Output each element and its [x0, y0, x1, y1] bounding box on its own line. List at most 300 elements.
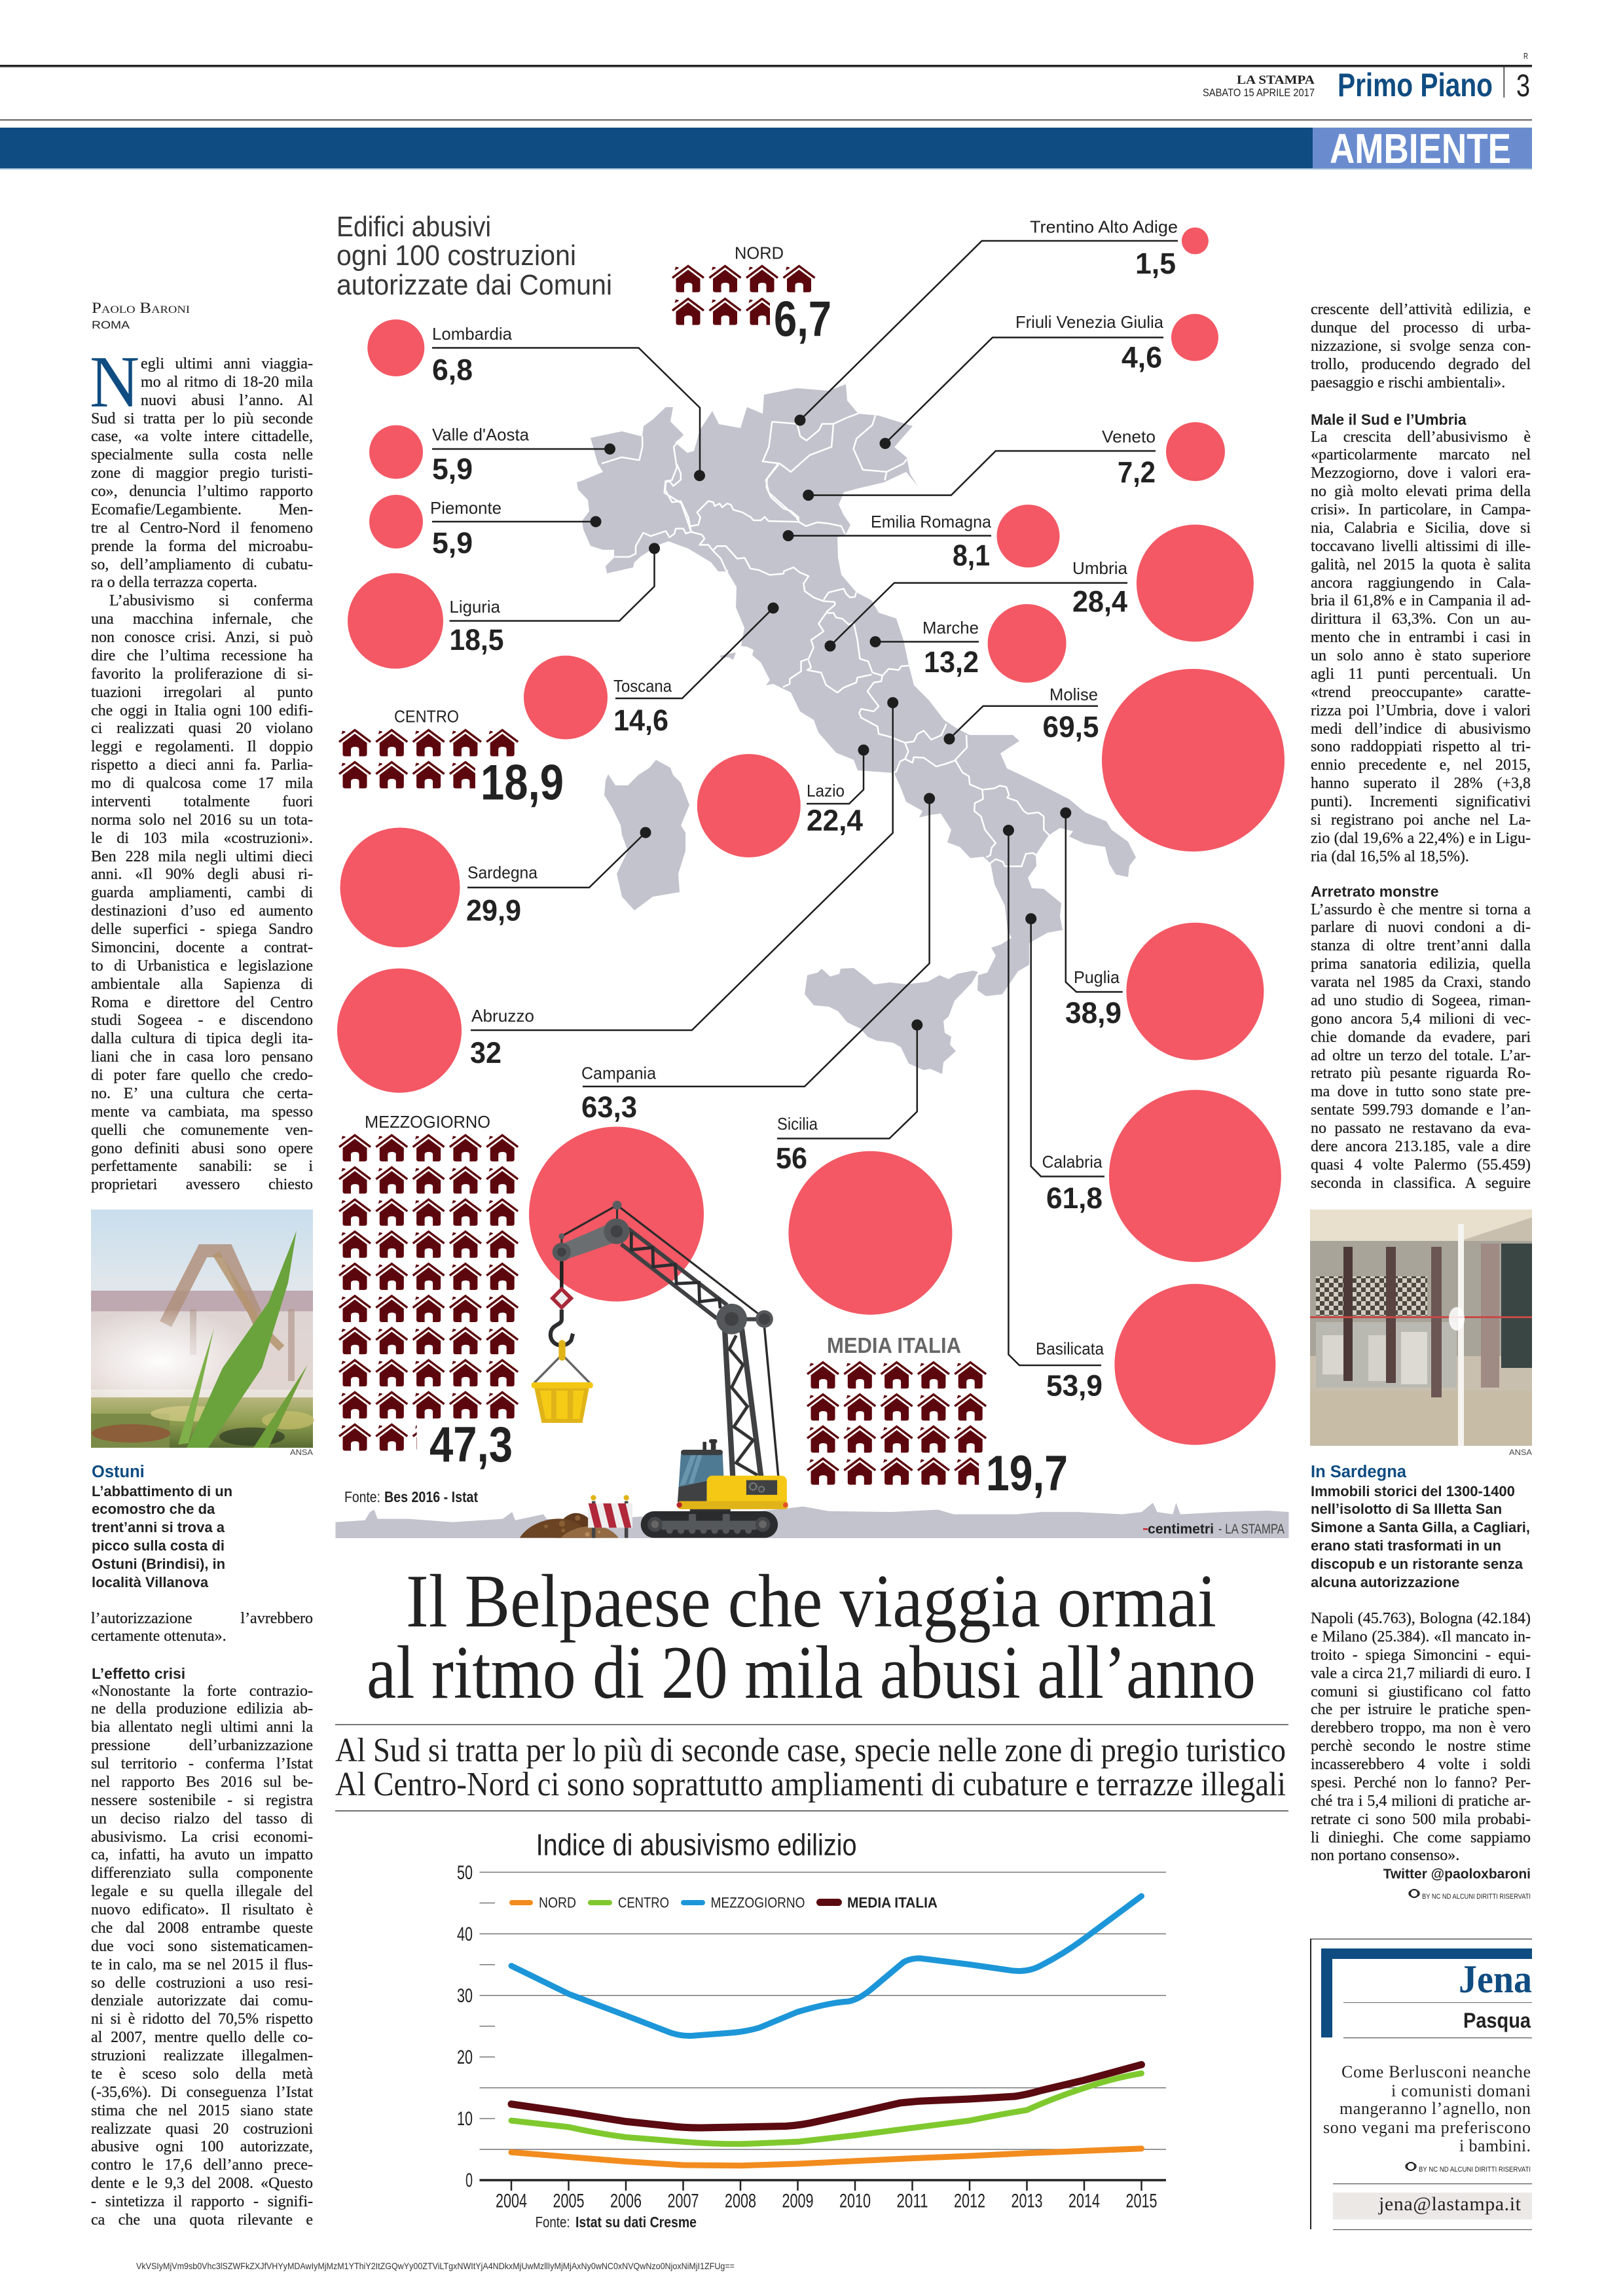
region: Umbria: 28,4 [1072, 585, 1127, 619]
region: Marche: Marche [922, 618, 979, 637]
y axis labels: 20 [457, 2047, 473, 2068]
article text: left column first part: di poter fare quello che credo- [91, 1067, 313, 1084]
article text: left column first part: to di Urbanistica e legislazione [91, 958, 313, 975]
article text: L'effetto crisi: so delle costruzioni a uso resi- [91, 1974, 313, 1991]
article text: left column first part: che oggi in Italia ogni 100 edifi- [91, 702, 313, 719]
source: Bes 2016 - Istat: Bes 2016 - Istat [384, 1488, 478, 1505]
region: Basilicata [1003, 825, 1275, 1445]
region: Friuli Venezia Giulia: 4,6 [1122, 340, 1162, 374]
region: Sardegna: Sardegna [467, 863, 538, 882]
region: Sardegna [340, 827, 651, 948]
caption: Ostuni: Ostuni (Brindisi), in [92, 1556, 225, 1572]
mark R: R [1523, 51, 1528, 61]
Jena subtitle: Pasqua [1463, 2009, 1531, 2032]
contact: jena email: jena@lastampa.it [1378, 2193, 1522, 2215]
pictogram: Nord [672, 243, 831, 348]
article text: right column ending: retrate ci sono 500 mila probabi- [1311, 1811, 1531, 1828]
x axis labels: 2014 [1068, 2191, 1100, 2212]
caption: In Sardegna: Simone a Santa Gilla, a Cagliari, [1311, 1519, 1530, 1535]
article text: left column first part: favorito la proliferazione di si- [91, 666, 313, 683]
article text: right column opening: paesaggio e rischi ambientali». [1311, 374, 1505, 391]
author handle: Twitter @paoloxbaroni [1383, 1867, 1531, 1882]
region: Piemonte: Piemonte [430, 498, 501, 518]
article text: left column first part: dire che l’ultima recessione ha [91, 647, 313, 664]
article text: Male il Sud: sono raddoppiati rispetto al tri- [1311, 738, 1531, 755]
region: Friuli Venezia Giulia [880, 312, 1218, 449]
skyline [335, 1503, 1288, 1538]
pictogram: Nord: NORD [735, 243, 784, 263]
region: Campania: 63,3 [581, 1090, 637, 1124]
box: Jena column [1310, 1939, 1532, 2230]
caption: In Sardegna: discopub e un ristorante senza [1311, 1556, 1523, 1572]
region: Veneto [803, 422, 1225, 501]
region: Toscana: 14,6 [613, 704, 668, 737]
article text: right column ending: che per istruire le pratiche spen- [1311, 1701, 1531, 1718]
region: Puglia: 38,9 [1065, 996, 1122, 1030]
article text: L'effetto crisi: legale e su quella illegale del [91, 1883, 313, 1900]
article text: left column first part: L’abusivismo si conferma [109, 592, 313, 609]
article text: right column ending: li dinieghi. Che come sappiamo [1311, 1829, 1531, 1846]
caption: Ostuni [92, 1483, 232, 1590]
caption: In Sardegna: alcuna autorizzazione [1311, 1574, 1459, 1590]
y axis labels: 30 [457, 1985, 473, 2007]
page number: 3 [1516, 69, 1530, 103]
article text: left column first part: ambientale alla Sapienza di [91, 976, 313, 993]
region: Friuli Venezia Giulia: Friuli Venezia Giulia [1015, 312, 1164, 332]
chart source [536, 2214, 697, 2231]
pictogram: Nord: 6,7 [774, 292, 831, 348]
article text: left column first part: quelli che comunemente ven- [91, 1122, 313, 1139]
article text: left column first part: non conosce crisi. Anzi, si può [91, 629, 313, 646]
pictogram: Mezzogiorno [339, 1112, 518, 1473]
article text: left column first part: Roma e direttore del Centro [91, 994, 313, 1011]
article text: L'effetto crisi: struzioni realizzate illegalmen- [91, 2047, 313, 2064]
infographic title: autorizzate dai Comuni [337, 269, 612, 301]
article text: L'effetto crisi: bia allentato negli ultimi anni la [91, 1719, 313, 1736]
article text: Male il Sud: toccavano livelli altissimi di ille- [1311, 538, 1531, 555]
article text: Male il Sud: «trend preoccupante» caratte- [1311, 684, 1531, 701]
x axis labels: 2009 [782, 2191, 813, 2212]
chart legend: CENTRO [618, 1894, 669, 1911]
series: Centro [511, 2073, 1142, 2144]
article text: left column first part: gono definiti abusi sono opere [91, 1140, 313, 1157]
caption: Ostuni: L’abbattimento di un [92, 1483, 232, 1499]
region: Veneto: Veneto [1102, 427, 1156, 446]
article text: Arretrato monstre: gono ancora 5,4 milioni di vec- [1311, 1011, 1531, 1028]
article text: L'effetto crisi: «Nonostante la forte contrazio- [91, 1682, 313, 1699]
pictogram: Mezzogiorno: MEZZOGIORNO [365, 1112, 490, 1132]
article text: left column first part: dalla cultura di tipica degli ita- [91, 1030, 313, 1047]
article text: L'effetto crisi: realizzate quasi 20 costruzioni [91, 2121, 313, 2138]
caption: Ostuni: località Villanova [92, 1574, 208, 1590]
chart source: Fonte: [536, 2214, 570, 2231]
pictogram: Centro: 18,9 [481, 755, 564, 811]
region: Liguria: Liguria [449, 597, 501, 617]
region: Campania [529, 793, 935, 1301]
region: Valle d'Aosta: Valle d'Aosta [432, 425, 530, 444]
article text: L'effetto crisi: dente e le 9,3 del 2008. «Questo [91, 2175, 313, 2192]
article text: L'effetto crisi: abusive ogni 100 autorizzate, [91, 2138, 313, 2155]
article text: left column first part: Simoncini, docente a contrat- [91, 939, 313, 956]
region: Emilia Romagna: Emilia Romagna [871, 512, 992, 531]
region: Liguria [348, 543, 660, 669]
y axis labels: 40 [457, 1924, 473, 1945]
x axis labels: 2005 [553, 2191, 584, 2212]
region: Umbria [825, 525, 1254, 652]
article text: L'effetto crisi: contro le 17,6 dell’anno prece- [91, 2157, 313, 2174]
contact: jena email [1333, 2193, 1532, 2219]
article text: left column first part: delle superfici - spiega Sandro [91, 921, 313, 938]
subheading: Male il Sud e l'Umbria: Male il Sud e l’Umbria [1311, 411, 1467, 428]
article text: Arretrato monstre: dere ancora 213.185, vale a dire [1311, 1138, 1531, 1155]
article text: Arretrato monstre: no passato ne restavano da eva- [1311, 1120, 1531, 1137]
article text: opening lines beside drop cap [141, 355, 313, 409]
article text: Male il Sud: La crescita dell’abusivismo è [1311, 428, 1531, 445]
chart title: Indice di abusivismo edilizio [536, 1828, 857, 1862]
article text: Male il Sud [1311, 428, 1531, 865]
pictogram: Centro [339, 707, 564, 811]
article text: L'effetto crisi: te in calo, ma se nel 2015 il flus- [91, 1956, 313, 1973]
article text: Arretrato monstre: ad uno studio di Sogeea, riman- [1311, 992, 1531, 1009]
region: Liguria: 18,5 [449, 623, 504, 656]
source: Bes 2016 - Istat [344, 1488, 478, 1505]
article text: left column continuation: certamente ottenuta». [91, 1628, 227, 1645]
section name: Primo Piano: Primo Piano [1338, 67, 1493, 103]
masthead: La Stampa and date: LA STAMPA [1237, 73, 1315, 87]
article text: L'effetto crisi: denziale autorizzate dai comu- [91, 1992, 313, 2009]
region: Molise: Molise [1049, 685, 1098, 704]
licence line: Jena: BY NC ND ALCUNI DIRITTI RISERVATI [1419, 2166, 1531, 2174]
pictogram: Media Italia: MEDIA ITALIA [827, 1333, 961, 1357]
article text: L'effetto crisi [90, 1682, 313, 2229]
article text: Arretrato monstre: retrato più pesante riguarda Ro- [1311, 1065, 1531, 1082]
article text: Arretrato monstre: parlare di nuovi condoni a di- [1311, 919, 1531, 936]
article text: opening lines beside drop cap: mo al ritmo di 18-20 mila [141, 374, 313, 391]
region: Basilicata: Basilicata [1036, 1339, 1104, 1359]
article text: right column ending: non portano consenso». [1311, 1847, 1459, 1864]
article text: left column first part: tuazioni irregolari al punto [91, 684, 313, 701]
series: Nord [511, 2149, 1142, 2166]
x axis labels: 2006 [610, 2191, 642, 2212]
licence line: Jena [1406, 2162, 1531, 2174]
region: Basilicata: 53,9 [1046, 1369, 1103, 1403]
pictogram: Media Italia [807, 1333, 1068, 1501]
article text: Male il Sud: agli 11 punti percentuali. Un [1311, 666, 1531, 683]
article text: right column ending: perchè secondo le nostre stime [1311, 1738, 1531, 1755]
article text: left column first part: no. E’ una cultura che certa- [91, 1085, 313, 1102]
region: Lombardia [367, 319, 705, 481]
x axis labels: 2013 [1011, 2191, 1042, 2212]
article text: Male il Sud: punti). Incrementi significativi [1311, 793, 1531, 810]
region: Emilia Romagna [783, 505, 1059, 572]
article text: left column first part: so, dell’ampliamento di cubatu- [91, 556, 313, 573]
region: Trentino Alto Adige: 1,5 [1135, 247, 1176, 280]
article text: right column ending: vale a circa 21,7 miliardi di euro. I [1311, 1665, 1531, 1682]
article text: left column first part: mente va cambiata, ma spesso [91, 1103, 313, 1121]
article text: right column opening: dunque del processo di urba- [1311, 319, 1531, 336]
byline: Paolo Baroni [92, 300, 190, 316]
tag: Ambiente: AMBIENTE [1330, 125, 1511, 172]
subheading: Arretrato monstre: Arretrato monstre [1311, 883, 1439, 900]
article text: L'effetto crisi: ne della produzione edilizia ab- [91, 1700, 313, 1717]
x axis labels: 2007 [668, 2191, 699, 2212]
article text: left column first part: ra o della terrazza coperta. [91, 574, 257, 591]
article text: Male il Sud: ancora raggiungendo in Cala- [1311, 575, 1531, 592]
caption: In Sardegna: erano stati trasformati in un [1311, 1537, 1501, 1554]
article text: left column first part: ci realizzati quasi 20 violano [91, 720, 313, 737]
region: Marche: 13,2 [924, 645, 979, 679]
y axis labels: 50 [457, 1862, 473, 1884]
article text: Male il Sud: galità, nel 2015 la quota è salita [1311, 556, 1531, 573]
article text: L'effetto crisi: che dal 2008 entrambe queste [91, 1920, 313, 1937]
article text: left column first part [91, 410, 313, 1193]
licence line: author: BY NC ND ALCUNI DIRITTI RISERVATI [1422, 1893, 1531, 1901]
article text: Arretrato monstre: stanza di oltre trent’anni dalla [1311, 937, 1531, 954]
article text: right column opening: crescente dell’attività edilizia, e [1311, 301, 1531, 318]
region: Lazio: 22,4 [807, 804, 863, 837]
credit: Centimetri - La Stampa [1143, 1522, 1285, 1537]
article text: Male il Sud: crisi». In particolare, in Campa- [1311, 501, 1531, 518]
article text: right column ending: e Milano (25.384). «Il mancato in- [1311, 1628, 1531, 1645]
Jena joke text: i bambini. [1459, 2136, 1531, 2155]
article text: left column first part: destinazioni d’uso ed aumento [91, 903, 313, 920]
article text: left column continuation: l’autorizzazione l’avrebbero [91, 1610, 313, 1627]
region: Valle d'Aosta: 5,9 [432, 452, 473, 486]
series: Mezzogiorno [511, 1896, 1142, 2036]
article text: Male il Sud: hanno superato il 28% (+3,8 [1311, 775, 1531, 792]
article text: Arretrato monstre: sentate 599.793 domande e l’an- [1311, 1102, 1531, 1119]
Jena joke text: mangeranno l’agnello, non [1340, 2099, 1531, 2118]
article text: Male il Sud: bria il 61,8% e in Campania il ad- [1311, 592, 1531, 609]
article text: right column ending [1311, 1610, 1531, 1864]
chart source: Istat su dati Cresme [575, 2214, 697, 2231]
illustration: crane [532, 1200, 788, 1538]
headline [367, 1560, 1256, 1715]
region: Sicilia: Sicilia [777, 1114, 818, 1134]
article text: left column first part: interventi totalmente fuori [91, 793, 313, 810]
article text: L'effetto crisi: - sintetizza il rapporto - signifi- [91, 2193, 313, 2210]
article text: L'effetto crisi: abusivismo. La crisi economi- [91, 1829, 313, 1846]
article text: opening lines beside drop cap: egli ultimi anni viaggia- [141, 355, 313, 372]
article text: left column first part: Ben 228 mila negli ultimi dieci [91, 848, 313, 865]
caption: Ostuni: picco sulla costa di [92, 1537, 225, 1554]
Jena joke text: Come Berlusconi neanche [1341, 2062, 1531, 2081]
article text: L'effetto crisi: pressione dell’urbanizzazione [91, 1737, 313, 1754]
x axis labels: 2012 [954, 2191, 985, 2212]
pictogram: Mezzogiorno: 47,3 [429, 1417, 513, 1473]
article text: right column opening: trollo, producendo degrado del [1311, 356, 1531, 373]
headline: al ritmo di 20 mila abusi all’anno [367, 1631, 1256, 1715]
region: Abruzzo [337, 697, 898, 1093]
photo: Ostuni demolition [62, 1210, 314, 1448]
chart legend: MEDIA ITALIA [847, 1894, 938, 1911]
article text: left column first part: guarda ampliamenti, cambi di [91, 884, 313, 901]
page code string: VkVSIyMjVm9sb0Vhc3lSZWFkZXJfVHYyMDAwIyMjMzM1YThiY2ItZGQwYy00ZTViLTgxNWItYjA4NDkxMjUwMzllIyMjMjAxNy0wNC0xNVQwNzo0NjoxNiMjI1ZFUg== [136, 2261, 735, 2271]
article text: Arretrato monstre: ma dove in tutto sono state pre- [1311, 1083, 1531, 1100]
region: Puglia [1060, 808, 1264, 1060]
subheadline [335, 1732, 1286, 1803]
region: Puglia: Puglia [1074, 967, 1120, 987]
article text: Male il Sud: un solo anno è stato superiore [1311, 647, 1531, 664]
article text: left column first part: mo di qualcosa come 17 mila [91, 775, 313, 792]
region: Veneto: 7,2 [1118, 456, 1156, 489]
region: Molise [944, 669, 1285, 852]
Jena joke text [1323, 2062, 1531, 2155]
source: Bes 2016 - Istat: Fonte: [344, 1488, 380, 1505]
region: Trentino Alto Adige [795, 217, 1209, 425]
region: Piemonte: 5,9 [432, 526, 473, 560]
region: Toscana [524, 602, 779, 740]
article text: left column first part: specialmente sulla costa nelle [91, 446, 313, 463]
chart legend [509, 1894, 938, 1911]
article text: Male il Sud: ennio precedente e, nel 2015, [1311, 757, 1531, 774]
region: Abruzzo: 32 [470, 1036, 501, 1069]
masthead: La Stampa and date [1203, 73, 1315, 99]
article text: L'effetto crisi: al 2007, mentre quello delle co- [91, 2029, 313, 2046]
byline: ROMA [92, 319, 130, 331]
article text: L'effetto crisi: te è sceso solo della metà [91, 2066, 313, 2083]
infographic title [337, 211, 612, 301]
article text: right column ending: derebbero troppo, ma non è vero [1311, 1719, 1531, 1736]
x axis labels: 2015 [1126, 2191, 1158, 2212]
photo: Sardegna restaurant [1310, 1210, 1532, 1446]
region: Calabria [1025, 913, 1281, 1262]
article text: left column first part: proprietari avessero chiesto [91, 1176, 313, 1193]
region: Trentino Alto Adige: Trentino Alto Adige [1030, 217, 1178, 237]
region: Lombardia: Lombardia [432, 324, 513, 344]
article text: Arretrato monstre: L’assurdo è che mentre si torna a [1311, 901, 1531, 918]
blue band [0, 128, 1532, 170]
article text: left column first part: anni. «Il 90% degli abusi ri- [91, 866, 313, 883]
subheading: L'effetto crisi: L’effetto crisi [92, 1665, 185, 1682]
caption title: In Sardegna: In Sardegna [1311, 1463, 1406, 1481]
map of Italy [577, 384, 1136, 1074]
series: Media Italia [511, 2064, 1142, 2128]
article text: Male il Sud: medi dell’indice di abusivismo [1311, 720, 1531, 737]
region: Calabria: 61,8 [1046, 1181, 1103, 1215]
article text: L'effetto crisi: stima che nel 2015 siano state [91, 2102, 313, 2119]
article text: Arretrato monstre [1311, 901, 1531, 1192]
caption: In Sardegna: Immobili storici del 1300-1400 [1311, 1483, 1515, 1499]
article text: left column first part: una macchina infernale, che [91, 611, 313, 628]
region: Campania: Campania [581, 1064, 657, 1083]
region: Lombardia: 6,8 [432, 353, 473, 387]
page header rules [0, 65, 1532, 120]
pictogram: Media Italia: 19,7 [986, 1446, 1068, 1501]
article text: Arretrato monstre: ad oltre un terzo del totale. L’ar- [1311, 1047, 1531, 1064]
Jena joke text: i comunisti domani [1391, 2081, 1531, 2100]
article text: opening lines beside drop cap: nuovi abusi l’anno. Al [141, 392, 313, 409]
region: Sicilia [776, 1020, 952, 1315]
article text: left column first part: tre al Centro-Nord il fenomeno [91, 520, 313, 537]
article text: L'effetto crisi: nuovo edificato». Il risultato è [91, 1901, 313, 1918]
byline [92, 300, 190, 331]
article text: left column first part: perfettamente sanabili: se i [91, 1158, 313, 1175]
chart legend: MEZZOGIORNO [711, 1894, 805, 1911]
region: Toscana: Toscana [613, 676, 672, 696]
region: Sardegna: 29,9 [466, 894, 521, 927]
region: Sicilia: 56 [776, 1141, 807, 1175]
article text: left column first part: rispetto a dieci anni fa. Parlia- [91, 757, 313, 774]
article text: left column first part: prende la forma del microabu- [91, 538, 313, 555]
caption: In Sardegna [1311, 1483, 1530, 1590]
article text: left column first part: Ecomafie/Legambiente. Men- [91, 501, 313, 518]
credit: Centimetri - La Stampa: - LA STAMPA [1218, 1522, 1285, 1537]
article text: right column ending: spesi. Perché non lo fanno? Per- [1311, 1774, 1531, 1791]
article text: L'effetto crisi: sul territorio - conferma l’Istat [91, 1755, 313, 1772]
article text: left column first part: norma solo nel 2016 su un tota- [91, 812, 313, 829]
y axis labels [457, 1862, 473, 2191]
article text: L'effetto crisi: (-35,6%). Di conseguenza l’Istat [91, 2084, 313, 2101]
y axis labels: 0 [465, 2170, 473, 2191]
subheadline: Al Sud si tratta per lo più di seconde case, specie nelle zone di pregio turistico [335, 1732, 1286, 1769]
article text: right column ending: ché tra i 5,4 milioni di pratiche ar- [1311, 1793, 1531, 1810]
x axis labels: 2004 [496, 2191, 527, 2212]
line chart: Indice di abusivismo edilizio [457, 1828, 1166, 2231]
article text: Male il Sud: nia, Calabria e Sicilia, dove si [1311, 520, 1531, 537]
article text: Arretrato monstre: quasi 4 volte Palermo (55.459) [1311, 1157, 1531, 1174]
headline: Il Belpaese che viaggia ormai [406, 1560, 1216, 1643]
article text: L'effetto crisi: ni si è ridotto del 70,5% rispetto [91, 2011, 313, 2028]
pictogram: Centro: CENTRO [394, 707, 459, 726]
region: Calabria: Calabria [1042, 1152, 1103, 1172]
Jena title: Jena [1459, 1958, 1532, 2001]
chart legend: NORD [539, 1894, 576, 1911]
article text: right column ending: troito - spiega Simoncini - equi- [1311, 1647, 1531, 1664]
masthead: La Stampa and date: SABATO 15 APRILE 2017 [1203, 86, 1315, 99]
region: Valle d'Aosta [369, 425, 615, 486]
article text: Male il Sud: mento che in entrambi i casi in [1311, 629, 1531, 646]
article text: L'effetto crisi: un deciso rialzo del tasso di [91, 1810, 313, 1827]
region: Lazio [697, 745, 869, 857]
region: Lazio: Lazio [807, 781, 845, 800]
x axis labels: 2011 [897, 2191, 928, 2212]
article text: L'effetto crisi: ca che una quota rilevante e [91, 2212, 313, 2229]
article text: L'effetto crisi: nessere sostenibile - si registra [91, 1792, 313, 1809]
article text: left column first part: le di 103 mila «costruzioni». [91, 830, 313, 847]
x axis labels: 2008 [725, 2191, 756, 2212]
article text: L'effetto crisi: nel rapporto Bes 2016 sul be- [91, 1774, 313, 1791]
article text: Male il Sud: zio (dal 19,6% a 22,4%) e in Ligu- [1311, 830, 1531, 847]
Jena joke text: sono vegani ma preferiscono [1323, 2118, 1531, 2137]
article text: left column first part: liani che in casa loro pensano [91, 1049, 313, 1066]
grid and axes [479, 1872, 1166, 2191]
caption: Ostuni: trent’anni si trova a [92, 1519, 225, 1535]
article text: Arretrato monstre: seconda in classifica. A seguire [1311, 1175, 1531, 1192]
article text: left column first part: case, «a volte intere cittadelle, [91, 428, 313, 445]
region: Piemonte [369, 495, 601, 560]
article text: Male il Sud: ria (dal 16,5% al 18,5%). [1311, 848, 1469, 865]
x axis labels: 2010 [839, 2191, 871, 2212]
credit: ANSA right: ANSA [1509, 1448, 1532, 1457]
credit: ANSA: ANSA [290, 1448, 313, 1457]
article text: left column first part: zone di maggior pregio turisti- [91, 465, 313, 482]
caption title: Ostuni: Ostuni [92, 1463, 145, 1481]
credit: Centimetri - La Stampa: centimetri [1148, 1522, 1214, 1537]
article text: right column opening: nizzazione, si svolge senza con- [1311, 338, 1531, 355]
y axis labels: 10 [457, 2108, 473, 2130]
article text: Male il Sud: «particolarmente marcato nel [1311, 446, 1531, 463]
article text: Male il Sud: rizza poi l’Umbria, dove i valori [1311, 702, 1531, 719]
region: Emilia Romagna: 8,1 [953, 539, 990, 572]
drop cap: N [90, 342, 139, 423]
article text: Male il Sud: si registrano poi anche nel La- [1311, 812, 1531, 829]
illustration: mounds and barrier [520, 1495, 632, 1538]
region: Umbria: Umbria [1072, 558, 1128, 578]
article text: L'effetto crisi: due voci sono sistematicamen- [91, 1938, 313, 1955]
article text: left column continuation [91, 1610, 313, 1645]
subheadline: Al Centro-Nord ci sono soprattutto ampliamenti di cubature e terrazze illegali [335, 1766, 1286, 1803]
